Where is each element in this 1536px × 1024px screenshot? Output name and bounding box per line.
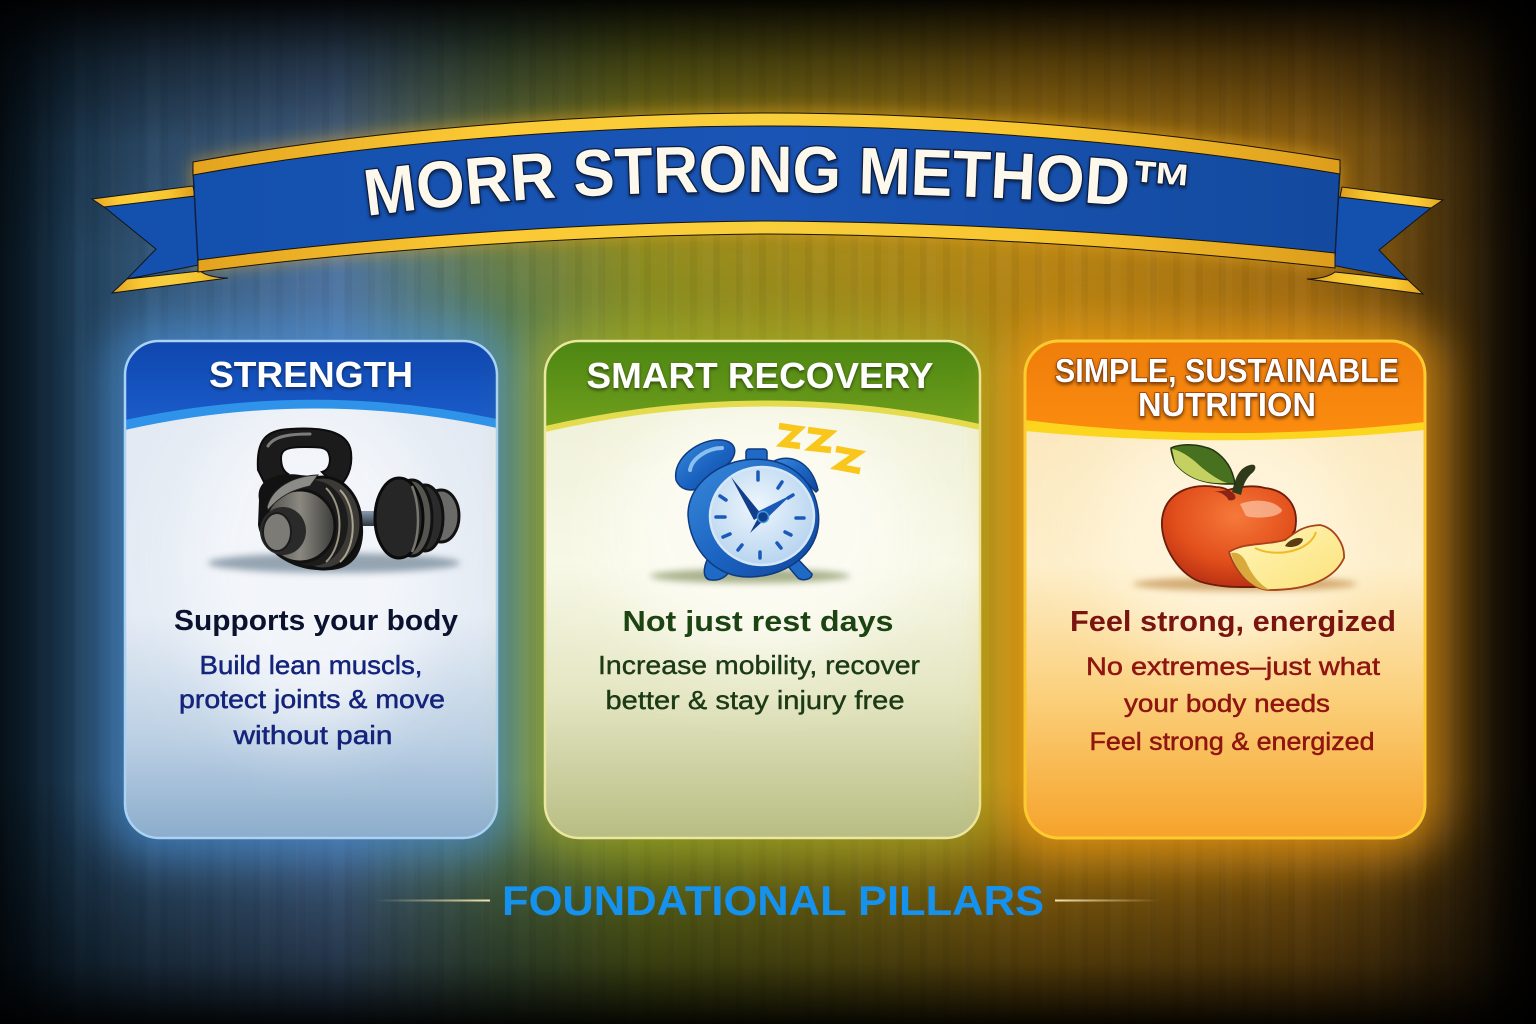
subheading: not just rest days: Not just rest days	[622, 606, 894, 638]
body text: Build lean muscls,	[200, 650, 422, 680]
banner glow	[193, 113, 1340, 270]
ribbon bottom gold edge	[198, 221, 1335, 272]
right ribbon tail	[1307, 187, 1443, 294]
subheading: supports your body: Supports your body	[174, 605, 458, 637]
banner title: MORR STRONG METHOD™	[362, 144, 1190, 220]
subheading: feel strong, energized: Feel strong, energized	[1070, 606, 1396, 638]
body text: Increase mobility, recover	[598, 650, 920, 680]
body text	[179, 650, 445, 750]
body text: your body needs	[1124, 690, 1330, 718]
body text: No extremes–just what	[1086, 653, 1380, 681]
panel: simple sustainable nutrition	[1005, 321, 1445, 858]
ribbon main	[193, 121, 1340, 262]
icon: alarm clock	[650, 426, 860, 583]
icon: z z z	[779, 426, 860, 471]
body text: better & stay injury free	[606, 685, 904, 715]
banner	[90, 102, 1444, 295]
heading: simple sustainable nutrition: SIMPLE, SUSTAINABLE	[1055, 352, 1399, 389]
heading: simple sustainable nutrition	[1055, 352, 1399, 423]
body text	[1086, 653, 1380, 756]
left ribbon tail	[92, 186, 228, 293]
icon: kettlebell and dumbbell	[208, 428, 460, 573]
left rule	[375, 900, 490, 902]
body text: without pain	[232, 720, 392, 750]
body text: Feel strong & energized	[1090, 728, 1374, 756]
panel: smart recovery	[525, 321, 1000, 858]
right rule	[1055, 900, 1160, 902]
heading: simple sustainable nutrition: NUTRITION	[1138, 386, 1316, 423]
body text: protect joints & move	[179, 684, 445, 714]
body text	[598, 650, 920, 715]
footer label: FOUNDATIONAL PILLARS	[502, 877, 1044, 924]
icon: apple	[1133, 445, 1357, 591]
heading: strength: STRENGTH	[209, 354, 413, 395]
panel: strength	[105, 321, 517, 858]
ribbon top gold edge	[193, 113, 1340, 175]
heading: smart recovery: SMART RECOVERY	[586, 355, 934, 396]
infographic canvas	[79, 102, 1476, 916]
